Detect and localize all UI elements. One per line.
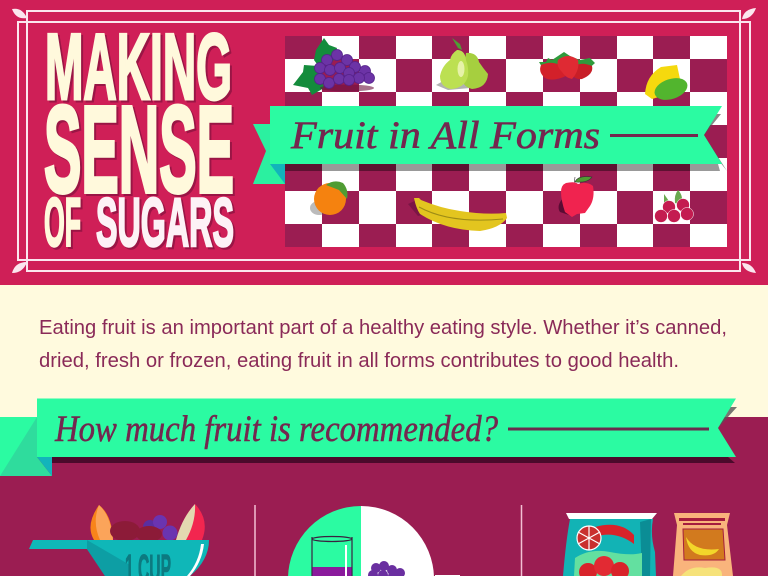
intro text block: dried, fresh or frozen, eating fruit in all forms contributes to good health. — [39, 350, 679, 372]
illustration: half circle juice and grapes — [288, 506, 460, 576]
grapes — [368, 561, 405, 576]
icon: cranberries — [654, 190, 694, 222]
intro panel background — [0, 285, 768, 417]
glass of juice — [312, 536, 352, 576]
icon: corner leaf top left — [12, 9, 27, 18]
ribbon rule — [508, 428, 709, 430]
header panel background — [0, 0, 768, 285]
illustration: measuring cup with fruit — [29, 504, 209, 576]
icon: corner leaf bottom left — [12, 262, 27, 273]
ribbon heading text: How much fruit is recommended? — [54, 409, 498, 450]
title: Making Sense of Sugars: OF — [44, 184, 81, 261]
ribbon: How much fruit is recommended? — [0, 398, 737, 476]
checkerboard tablecloth — [285, 36, 727, 247]
text: MAKING — [45, 14, 232, 119]
column dividers — [255, 505, 522, 576]
icon: lemon and lime — [645, 65, 690, 104]
illustration: dried fruit box — [673, 513, 733, 576]
icon: orange — [310, 181, 348, 215]
ribbon: Fruit in All Forms — [253, 106, 727, 184]
snowflake badge — [577, 526, 601, 550]
illustration: frozen fruit bag — [563, 513, 657, 576]
intro text block — [39, 317, 727, 372]
icon: banana — [408, 198, 507, 231]
icon: apple — [559, 177, 594, 217]
icon: grapes — [293, 38, 374, 95]
intro text block: Eating fruit is an important part of a healthy eating style. Whether it’s canned, — [39, 317, 727, 339]
icon: pears — [436, 38, 488, 90]
icon: corner leaf top right — [742, 8, 756, 19]
text: SENSE — [44, 82, 234, 219]
recommendation panel background — [0, 417, 768, 576]
text: SUGARS — [96, 184, 234, 261]
ribbon heading text: Fruit in All Forms — [290, 114, 600, 157]
decorative double frame — [12, 8, 756, 273]
ribbon rule — [610, 134, 698, 137]
icon: corner leaf bottom right — [742, 263, 756, 273]
title: Making Sense of Sugars — [44, 14, 234, 261]
icon: strawberries — [539, 52, 595, 80]
